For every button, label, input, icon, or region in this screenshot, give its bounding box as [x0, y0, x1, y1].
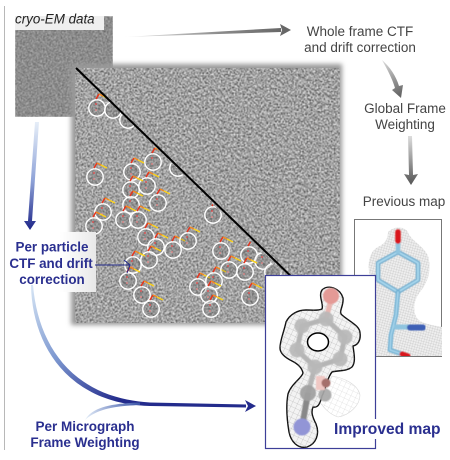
hole in density — [308, 333, 328, 351]
label: per particle CTF and drift correction — [6, 232, 130, 292]
arrow: to previous map — [404, 136, 418, 185]
panel: improved map — [266, 276, 442, 448]
label: per particle CTF and drift correction: correction — [19, 272, 85, 287]
arrow: per micrograph frame weighting branch — [85, 402, 140, 420]
text: whole frame CTF and drift correction: and drift correction — [304, 40, 416, 55]
text: global frame weighting: Global Frame — [364, 101, 446, 116]
image: small cryo-EM micrograph — [15, 12, 113, 117]
label: cryo-EM data: cryo-EM data — [15, 12, 95, 26]
particles: circled particles with trajectories — [86, 94, 281, 317]
text: per micrograph frame weighting: Per Micrograph — [35, 419, 135, 434]
mesh density: improved map — [280, 287, 360, 447]
faint mesh lobe — [318, 376, 360, 417]
label: per particle CTF and drift correction: CTF and drift — [9, 256, 93, 271]
label: per particle CTF and drift correction: Per particle — [16, 240, 88, 254]
text: per micrograph frame weighting: Frame Weighting — [30, 435, 140, 450]
mesh density: previous map — [369, 228, 442, 356]
label: improved map: Improved map — [334, 421, 441, 438]
divider: diagonal black line — [76, 68, 300, 285]
arrow: to global frame weighting — [382, 60, 403, 98]
molecule: blue stick model — [378, 232, 423, 356]
panel: previous map — [354, 220, 442, 356]
arrow: to whole frame correction — [124, 24, 291, 37]
molecule: sphere model — [290, 288, 352, 436]
text: global frame weighting: Weighting — [375, 117, 435, 132]
arrow: down to per particle correction — [24, 122, 39, 230]
image: main micrograph with particles — [71, 64, 342, 325]
text: whole frame CTF and drift correction: Whole frame CTF — [307, 24, 413, 39]
text: previous map: Previous map — [363, 194, 445, 209]
arrow: blue curve to improved map — [31, 285, 256, 412]
